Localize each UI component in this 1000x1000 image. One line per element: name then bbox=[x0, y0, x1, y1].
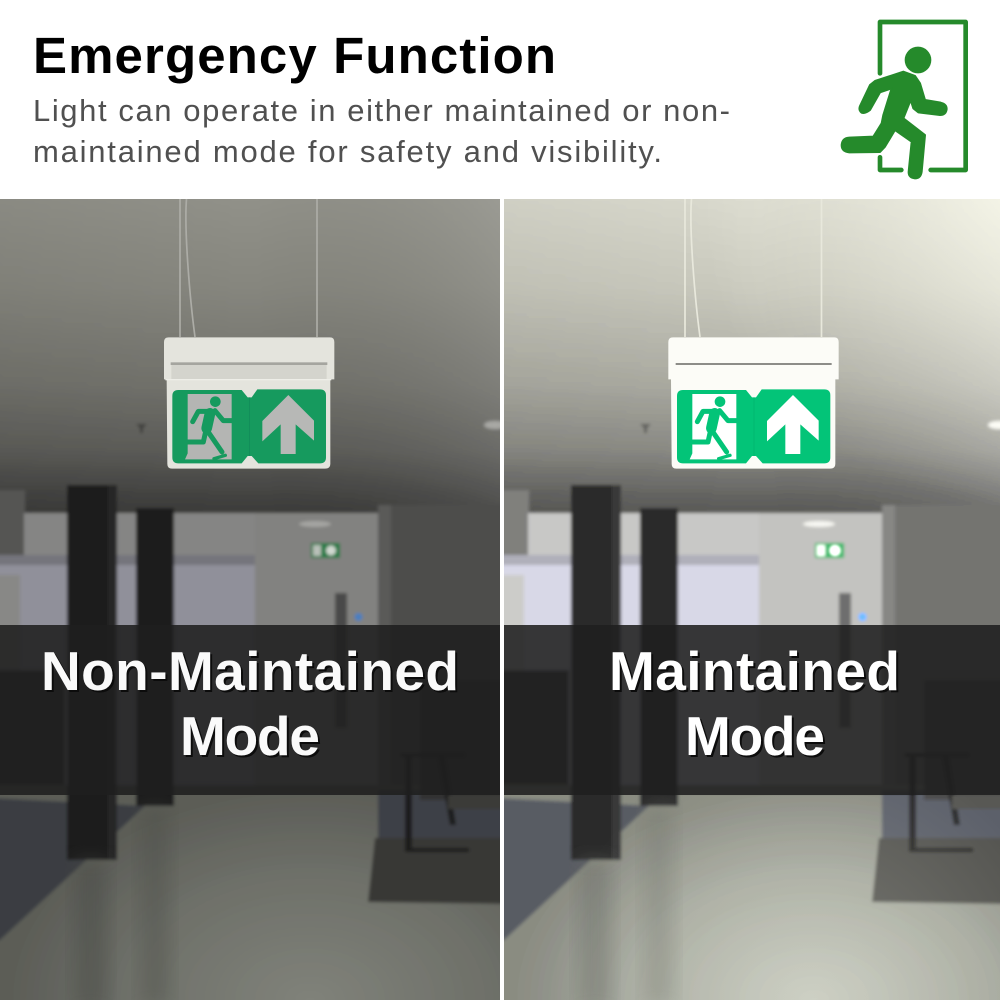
label: maintained mode: Mode bbox=[685, 705, 825, 767]
icon: running person through exit door bbox=[842, 22, 966, 178]
top-right ceiling glow bbox=[807, 199, 1000, 446]
pictogram door bbox=[690, 394, 736, 459]
arrow up bbox=[767, 395, 819, 454]
label: maintained mode bbox=[609, 640, 900, 767]
arrow up bbox=[262, 395, 314, 454]
hanging wires bbox=[685, 199, 822, 337]
exit sign: unlit bbox=[164, 337, 334, 469]
pictogram running man bbox=[692, 396, 736, 460]
panel: maintained mode photo bbox=[494, 190, 1000, 1000]
hanging wires bbox=[180, 199, 317, 337]
floor glow bbox=[646, 807, 992, 1000]
label: non-maintained mode bbox=[41, 640, 459, 767]
exit sign: lit bbox=[668, 337, 839, 469]
label: non-maintained mode: Mode bbox=[180, 705, 320, 767]
green plate bbox=[677, 389, 830, 463]
panel: non-maintained mode photo bbox=[0, 190, 510, 1000]
banner: left bbox=[0, 625, 500, 795]
banner: right bbox=[504, 625, 1000, 795]
description text: Light can operate in either maintained or non- bbox=[33, 93, 730, 128]
label: maintained mode: Maintained bbox=[609, 640, 900, 702]
pictogram door bbox=[185, 394, 232, 459]
pictogram running man bbox=[188, 396, 232, 460]
description text bbox=[33, 93, 730, 169]
description text: maintained mode for safety and visibility. bbox=[33, 134, 662, 169]
title: Emergency Function bbox=[33, 27, 556, 84]
green plate bbox=[172, 389, 326, 463]
label: non-maintained mode: Non-Maintained bbox=[41, 640, 459, 702]
